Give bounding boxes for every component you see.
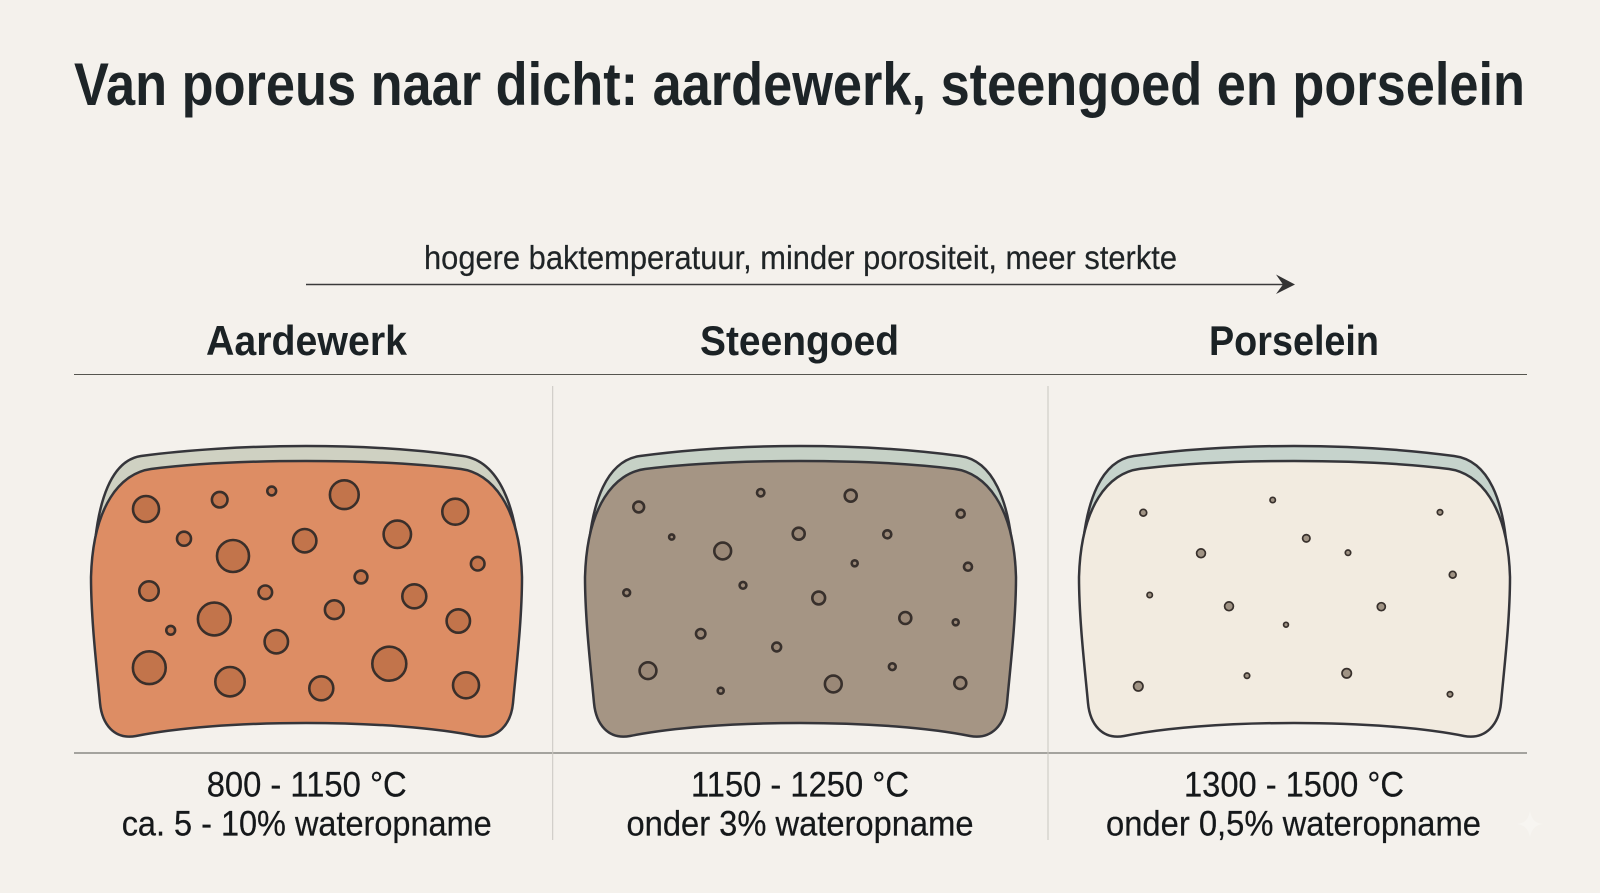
clay body: steengoed <box>585 461 1016 737</box>
stats: steengoed <box>626 766 974 844</box>
glaze layer: aardewerk <box>93 446 520 575</box>
arrow caption: hogere baktemperatuur, minder porositeit, meer sterkte <box>424 239 1177 276</box>
panel: porselein cross-section <box>1079 446 1510 737</box>
pores: porselein <box>1134 497 1456 697</box>
panel: aardewerk cross-section <box>91 446 522 737</box>
heading: Aardewerk: Aardewerk <box>206 317 408 364</box>
stats: aardewerk: ca. 5 - 10% wateropname <box>122 804 492 844</box>
heading: Steengoed: Steengoed <box>700 317 899 364</box>
stats: porselein <box>1106 766 1481 844</box>
stats: porselein: onder 0,5% wateropname <box>1106 804 1481 844</box>
arrow: increasing firing temperature <box>306 274 1295 294</box>
glaze layer: porselein <box>1081 446 1508 575</box>
clay body: aardewerk <box>91 461 522 737</box>
pores: aardewerk <box>133 480 485 700</box>
stats: steengoed: 1150 - 1250 °C <box>691 766 909 804</box>
panel: steengoed cross-section <box>585 446 1016 737</box>
stats: aardewerk <box>122 766 492 844</box>
stats: steengoed: onder 3% wateropname <box>626 804 974 844</box>
stats: aardewerk: 800 - 1150 °C <box>207 766 407 804</box>
glaze layer: steengoed <box>587 446 1014 575</box>
pores: steengoed <box>623 489 972 694</box>
clay body: porselein <box>1079 461 1510 737</box>
heading: Porselein: Porselein <box>1209 317 1379 364</box>
stats: porselein: 1300 - 1500 °C <box>1184 766 1404 804</box>
icon: faint sparkle <box>1517 811 1543 837</box>
